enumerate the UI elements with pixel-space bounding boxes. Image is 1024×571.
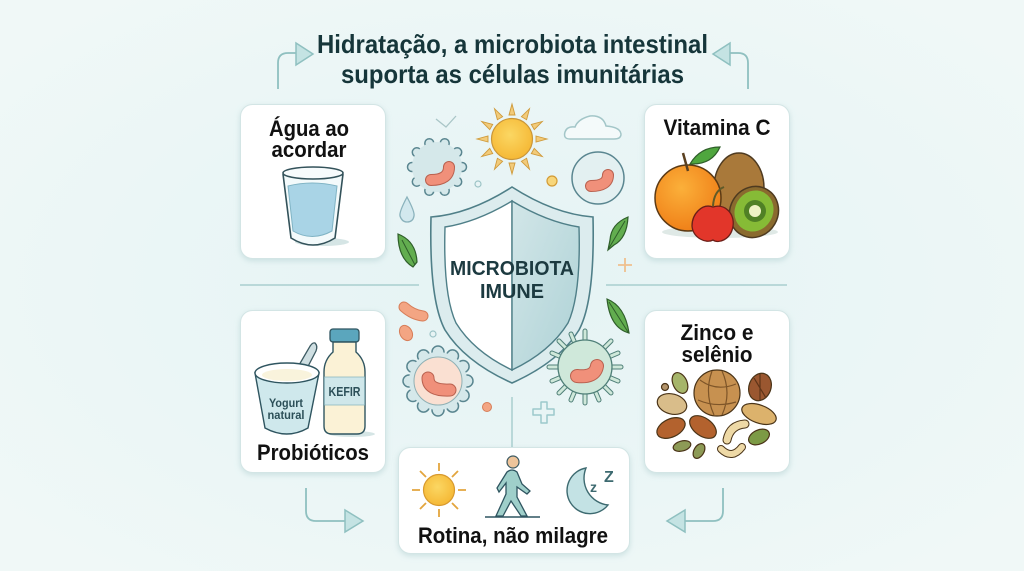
heading: água: acordar [272,137,347,162]
icon: lower leaf [607,299,629,333]
icon: small ring [430,331,436,337]
icon: peach cell [403,346,473,416]
panel: vitamina c [644,104,790,258]
title [317,29,708,89]
arrow: bottom left [306,488,363,532]
label: yogurt natural: natural [268,408,304,422]
icon: moon and zz [567,468,614,514]
title: suporta as células imunitárias [341,59,684,89]
heading: probióticos: Probióticos [257,440,369,465]
icon: kefir bottle [324,329,375,437]
icon: peach plus [618,258,632,272]
arrow: top right [713,43,748,89]
title: Hidratação, a microbiota intestinal [317,29,708,59]
label: yogurt natural: Yogurt [269,396,303,410]
icon: cloud [565,116,621,139]
icon: beans [397,307,423,343]
heading: rotina: Rotina, não milagre [418,523,608,548]
label: kefir: KEFIR [328,384,361,399]
icon: bird [436,116,456,127]
arrow: bottom right [667,488,723,532]
icon: teal plus [533,402,554,423]
shield text [450,258,574,303]
icon: sun [412,463,466,517]
panel: probióticos [240,310,386,472]
heading: água [269,116,349,162]
heading: água: Água ao [269,116,349,141]
panel: zinco e selênio [644,310,790,472]
icon: moon and zz: z [590,479,597,495]
heading: zinco [680,320,754,367]
icon: round immune cell [572,152,624,204]
heading: zinco: selênio [682,342,752,367]
icon: yogurt cup [255,343,319,434]
heading: vitamina c: Vitamina C [664,115,771,140]
shield text: MICROBIOTA [450,258,574,280]
icon: small dots [475,176,557,187]
icon: green virus cell [549,331,621,403]
icon: left leaf [398,234,417,267]
panel: água ao acordar [240,104,386,258]
icon: right leaf [608,217,628,250]
icon: nuts [654,370,779,460]
icon: big sun [477,104,547,174]
divider lines [240,285,787,450]
icon: walking person [485,456,540,517]
icon: moon and zz: Z [604,469,614,486]
arrow: top left [278,43,313,89]
icon: spiky immune cell [408,139,466,195]
label: yogurt natural [268,396,304,422]
shield [431,187,593,383]
heading: zinco: Zinco e [680,320,754,345]
icon: water drop [400,197,414,222]
shield text: IMUNE [480,281,544,303]
icon: orange dot [482,402,492,412]
icon: fruits [655,147,788,247]
icon: glass of water [283,167,349,246]
panel: rotina [398,448,630,554]
